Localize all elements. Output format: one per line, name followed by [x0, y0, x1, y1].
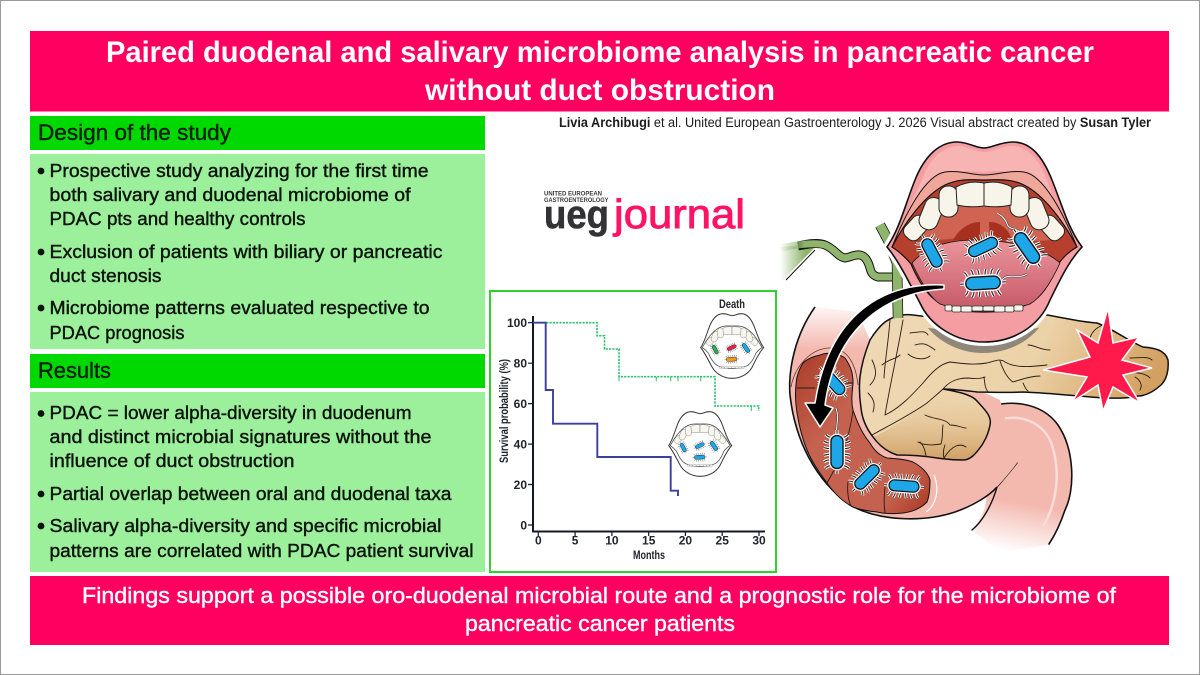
bullet: prospective study: both salivary and duodenal microbiome of [50, 184, 411, 205]
y axis: 60 [514, 397, 527, 411]
logo: ueg journal [544, 190, 745, 237]
panel: results [30, 392, 485, 572]
logo: ueg journal: ueg [544, 193, 609, 237]
bile duct [780, 225, 898, 318]
pancreas [859, 315, 1168, 460]
x axis [532, 531, 766, 562]
bacteria in mouth [912, 213, 1051, 298]
icon: tumour starburst [1043, 308, 1152, 411]
palate [922, 203, 1050, 241]
lower teeth [945, 305, 1023, 312]
bullet: prognosis [38, 297, 430, 343]
y axis: 0 [520, 518, 527, 532]
bullet: exclusion criteria [38, 241, 442, 286]
bullet: lower alpha-diversity [38, 402, 431, 471]
x axis: 10 [605, 534, 619, 548]
mouth [887, 142, 1082, 342]
bullet: lower alpha-diversity: PDAC = lower alpha-diversity in duodenum [50, 402, 412, 423]
cavity [892, 180, 1077, 312]
bullet: prospective study: Prospective study analyzing for the first time [50, 160, 429, 181]
tongue [912, 240, 1060, 309]
bacteria in duodenum [811, 359, 925, 500]
label: death: Death [719, 297, 745, 311]
duodenum opened lumen [796, 353, 930, 514]
panel: survival chart [490, 291, 776, 572]
bullet: exclusion criteria: Exclusion of patients with biliary or pancreatic [50, 241, 442, 262]
duodenum wall [790, 307, 1017, 519]
y axis [497, 316, 533, 532]
x axis: 5 [572, 534, 579, 548]
heading: design of the study: Design of the study [38, 120, 231, 145]
x axis: 30 [752, 534, 766, 548]
y axis: 20 [514, 478, 527, 492]
bullet: prognosis: Microbiome patterns evaluated respective to [50, 297, 430, 318]
y axis: 80 [514, 356, 527, 370]
conclusion banner: Findings support a possible oro-duodenal microbial route and a prognostic role for the microbiome of [82, 583, 1117, 608]
heading: results [30, 354, 485, 388]
upper teeth [901, 182, 1067, 244]
heading: results: Results [38, 358, 111, 383]
y axis: Survival probability (%) [497, 359, 511, 463]
survival curve: blue solid [533, 323, 678, 496]
y axis: 100 [507, 316, 527, 330]
title banner [30, 31, 1169, 112]
x axis: 20 [679, 534, 692, 548]
title banner: Paired duodenal and salivary microbiome analysis in pancreatic cancer [106, 36, 1094, 69]
conclusion banner: pancreatic cancer patients [465, 611, 735, 636]
survival curve: green dashed [533, 323, 759, 411]
bullet: lower alpha-diversity: influence of duct obstruction [50, 450, 294, 471]
bullet: partial overlap: Partial overlap between oral and duodenal taxa [50, 483, 452, 504]
bullet: salivary survival: Salivary alpha-diversity and specific microbial [50, 515, 441, 536]
bullet: salivary survival: patterns are correlated with PDAC patient survival [50, 540, 474, 561]
x axis: 15 [642, 534, 656, 548]
mouth shadow on pancreas [928, 328, 1040, 353]
x axis: 0 [535, 534, 542, 548]
gums [892, 172, 1077, 247]
conclusion banner [30, 576, 1169, 645]
arrow: mouth to duodenum [805, 285, 944, 427]
jejunum loop [972, 404, 1072, 552]
tonsils [953, 222, 1012, 240]
logo: ueg journal: GASTROENTEROLOGY [544, 197, 609, 204]
y axis: 40 [514, 438, 527, 452]
bullet: lower alpha-diversity: and distinct microbial signatures without the [50, 426, 432, 447]
bullet: prospective study: PDAC pts and healthy controls [50, 208, 306, 229]
logo: ueg journal: journal [613, 191, 745, 237]
logo: ueg journal: UNITED EUROPEAN [544, 190, 602, 198]
bullet: prognosis: PDAC prognosis [50, 322, 184, 343]
icon: mouth with mixed bacteria [701, 314, 764, 378]
panel: design of the study [30, 154, 485, 349]
citation line: Livia Archibugi et al. United European Gastroenterology J. 2026 Visual abstract created by Susan Tyler [559, 115, 1152, 130]
heading: design of the study [30, 116, 485, 150]
jejunum outline and highlight [972, 403, 1072, 544]
x axis: 25 [716, 534, 729, 548]
bullet: prospective study [38, 160, 429, 229]
bullet: salivary survival [38, 515, 474, 561]
bullet: exclusion criteria: duct stenosis [50, 265, 162, 286]
lips [887, 142, 1082, 342]
icon: mouth with uniform bacteria [669, 412, 732, 476]
illustration: oro-duodenal route [780, 142, 1168, 552]
title banner: without duct obstruction [424, 74, 775, 107]
x axis: Months [633, 548, 665, 562]
